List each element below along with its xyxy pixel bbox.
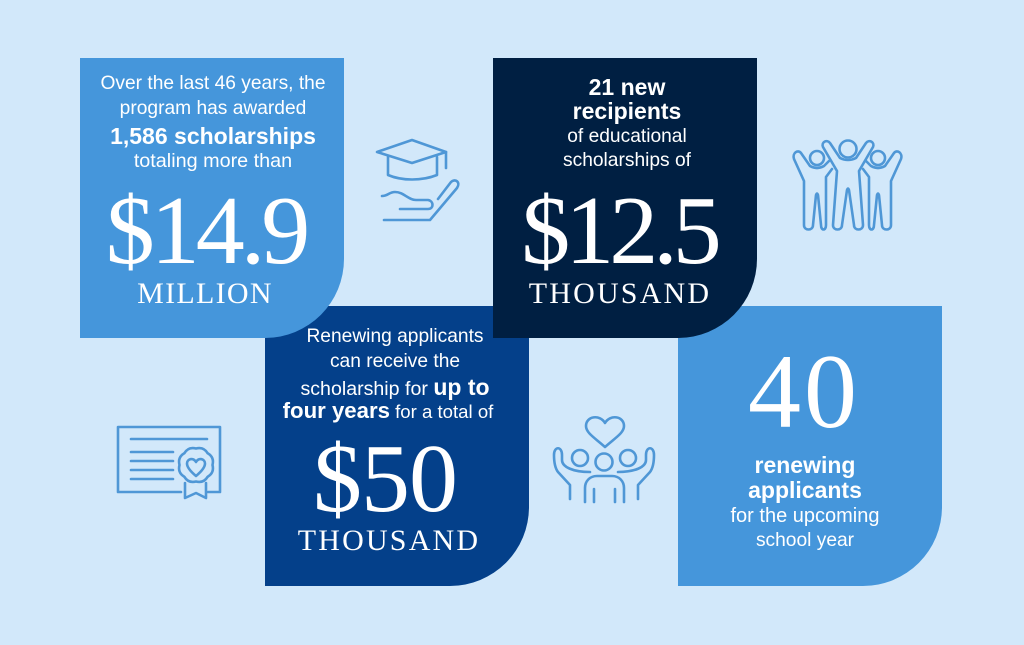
text: renewing applicants description: four years for a total of — [283, 398, 493, 423]
text: renewing applicants for upcoming year: renewing — [755, 452, 855, 478]
unit: million: MILLION — [137, 277, 273, 310]
figure: 40: 40 — [748, 333, 860, 450]
text: awarded scholarships description: program has awarded — [120, 98, 306, 119]
text: renewing applicants for upcoming year: school year — [756, 530, 854, 551]
text: new recipients description: 21 new — [589, 74, 665, 100]
icon: certificate with heart seal — [116, 426, 222, 500]
icon: graduation cap over hand — [376, 138, 460, 222]
text: new recipients description: recipients — [573, 98, 681, 124]
text: new recipients description: of educational — [567, 126, 687, 147]
text: renewing applicants description: Renewing applicants — [306, 326, 484, 347]
text: renewing applicants for upcoming year: for the upcoming — [730, 505, 879, 527]
panel: renewing applicants up to four years — [265, 306, 529, 586]
text: renewing applicants description: scholarship for up to — [300, 374, 490, 400]
text: renewing applicants for upcoming year — [730, 452, 879, 551]
text: renewing applicants description: can receive the — [330, 351, 460, 372]
text: awarded scholarships description: totaling more than — [134, 150, 292, 172]
panel: renewing applicants count — [678, 306, 942, 586]
text: renewing applicants for upcoming year: applicants — [748, 477, 862, 503]
text: renewing applicants description — [283, 326, 494, 423]
figure: $50: $50 — [313, 425, 457, 533]
text: awarded scholarships description: Over the last 46 years, the — [100, 73, 326, 94]
unit: thousand: THOUSAND — [298, 524, 480, 557]
figure: $12.5: $12.5 — [521, 177, 717, 285]
panel: awarded scholarships total — [80, 58, 344, 338]
figure: $14.9: $14.9 — [106, 177, 306, 285]
text: new recipients description — [563, 74, 691, 171]
panel: new recipients — [493, 58, 757, 338]
text: awarded scholarships description: 1,586 scholarships — [110, 123, 316, 149]
icon: group of people with heart — [552, 416, 656, 504]
icon: three people cheering — [792, 139, 903, 231]
text: awarded scholarships description — [100, 73, 326, 172]
text: new recipients description: scholarships of — [563, 150, 691, 171]
unit: thousand: THOUSAND — [529, 277, 711, 310]
